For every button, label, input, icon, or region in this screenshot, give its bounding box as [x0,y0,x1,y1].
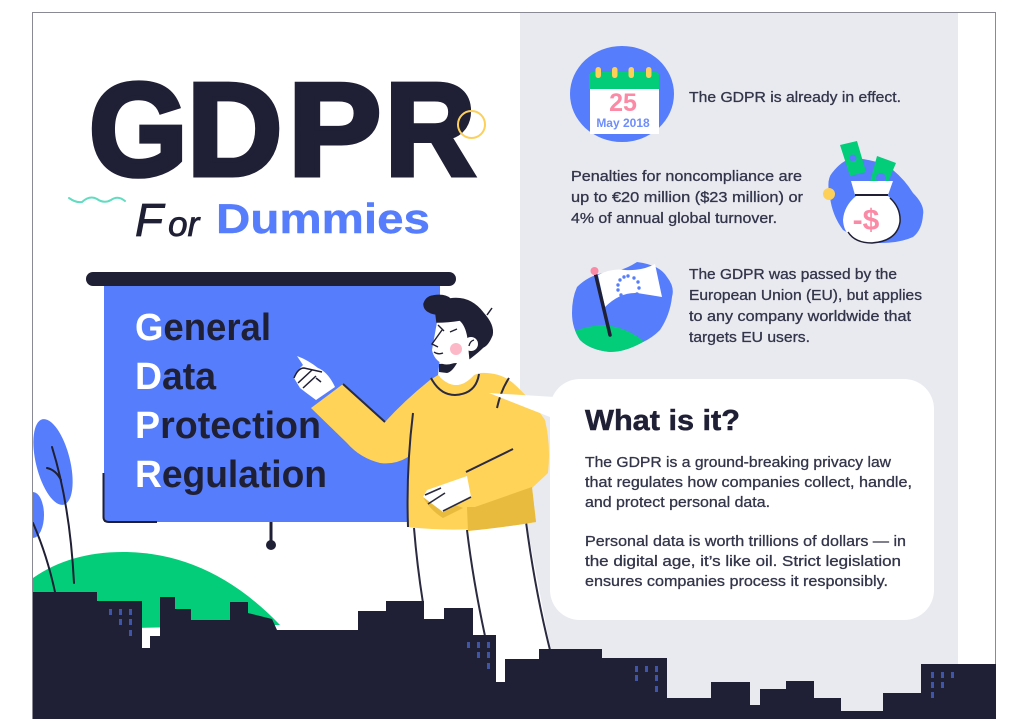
title: GDPR: D [187,56,282,203]
sweater lines [343,374,513,527]
neck [438,352,474,385]
cheek [450,343,462,355]
bag neck [851,181,893,195]
text: in effect: The GDPR is already in effect. [689,90,901,106]
icon: money bag [823,141,923,243]
flag ball [590,267,598,275]
callout: What is it [489,379,934,620]
text: passed by the EU: to any company worldwide that [689,309,911,325]
board top bar [86,272,456,286]
text: penalties [571,169,803,227]
green ground [575,325,644,352]
legs [412,520,551,700]
title: GDPR: G [89,57,188,204]
board text: General Data Protection Regulation: Regulation [135,454,327,496]
hair [424,295,492,358]
tree leaf small [33,492,44,538]
subtitle: For Dummies [135,194,430,246]
hill and trees [22,415,280,630]
text: penalties: 4% of annual global turnover. [571,211,777,227]
banknotes [840,141,896,183]
card [550,379,934,620]
board text: General Data Protection Regulation: General [135,307,271,349]
board corner line [104,473,157,522]
board text: General Data Protection Regulation: Data [135,356,217,398]
card paragraph two: ensures companies process it responsibly. [585,574,888,590]
bag body [843,196,900,242]
illustration: man pointing [294,295,551,700]
tree leaf large [33,419,73,505]
ear [464,337,478,351]
blob [572,262,673,352]
blue circle [570,46,674,142]
title: GDPR [89,56,476,204]
flag pole [595,272,610,335]
card paragraph two [585,534,906,590]
text: passed by the EU: European Union (EU), but applies [689,288,922,304]
resting hand lines [425,488,471,511]
sweater [311,373,549,530]
icon: calendar [570,46,674,142]
decorative teal squiggle [69,198,125,202]
calendar rings [596,67,652,78]
yellow coin [823,188,835,200]
icon: EU flag [572,262,673,355]
city skyline [33,592,996,719]
card paragraph one: and protect personal data. [585,495,770,511]
card paragraph two: the digital age, it’s like oil. Strict legislation [585,554,901,570]
title: GDPR: P [288,56,381,203]
decorative yellow ring [458,111,485,138]
text: penalties: up to €20 million ($23 million) or [571,190,803,206]
board text: General Data Protection Regulation [135,307,327,496]
skyline windows [109,609,954,698]
face [432,318,470,364]
text: passed by the EU [689,267,922,346]
card paragraph one [585,455,912,511]
board stem and knob [270,522,272,544]
subtitle word: Dummies: Dummies [216,195,430,242]
panel: grey right column [520,13,958,719]
blob [828,158,923,243]
pointing hand [294,356,335,400]
title: GDPR: R [385,56,476,204]
speech tail [489,393,555,419]
tree stems [33,447,74,592]
text: passed by the EU: The GDPR was passed by the [689,267,897,283]
calendar page [590,88,659,134]
calendar header [589,72,659,89]
board text: General Data Protection Regulation: Protection [135,405,321,447]
card paragraph two: Personal data is worth trillions of dollars — in [585,534,906,550]
card heading: What is it? [585,405,740,437]
skyline silhouette [33,592,996,719]
text: passed by the EU: targets EU users. [689,330,810,346]
calendar day: 25 [609,89,637,117]
calendar month: May 2018 [596,116,650,130]
leg lines [414,522,550,650]
bag symbol: -$ [853,204,880,237]
presentation board [86,272,456,550]
subtitle word: For: For [135,194,201,246]
card paragraph one: The GDPR is a ground-breaking privacy law [585,455,891,471]
resting hand [423,476,471,512]
flag stars [616,274,641,300]
board surface [104,285,440,522]
text: penalties: Penalties for noncompliance are [571,169,802,185]
flag cloth [598,264,662,307]
finger lines [294,368,322,388]
neck shadow [439,363,457,373]
card paragraph one: that regulates how companies collect, handle, [585,475,912,491]
green hill [33,552,280,630]
face lines [432,325,474,354]
sweater shading [423,487,536,531]
